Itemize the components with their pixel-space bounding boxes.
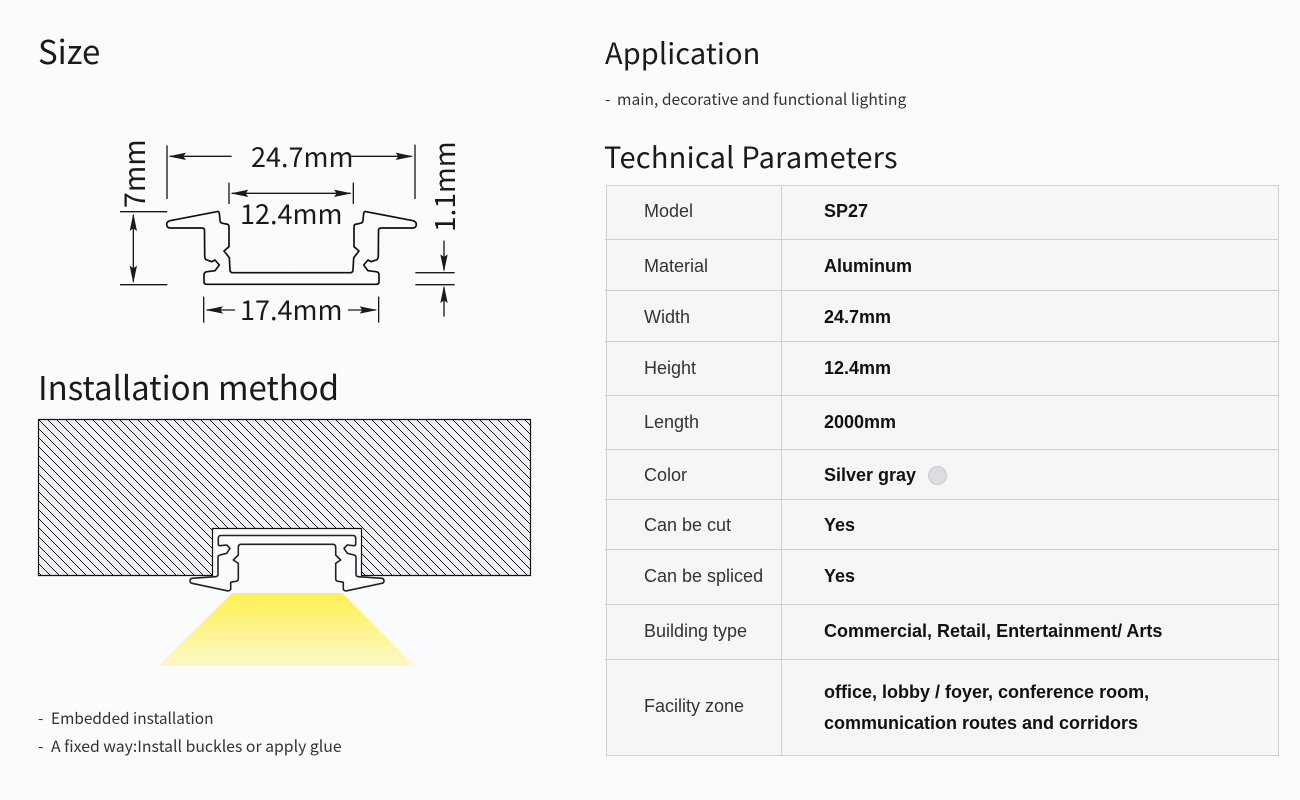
label: 1.1mm: 1.1mm	[424, 141, 464, 232]
value: Facility zone	[824, 682, 1149, 733]
light beam	[158, 593, 415, 666]
label: 12.4mm: 12.4mm	[240, 193, 342, 232]
value: Building type: Commercial, Retail, Entertainment/ Arts	[824, 621, 1162, 641]
technical parameters table	[606, 185, 1279, 756]
application text: main, decorative and functional lighting	[617, 88, 906, 110]
value: Can be cut: Yes	[824, 515, 855, 535]
row: Width: Width	[644, 307, 690, 327]
row: Height: Height	[644, 358, 696, 378]
label: 24.7mm: 24.7mm	[251, 136, 353, 175]
label: 17.4mm: 17.4mm	[240, 289, 342, 328]
installation note: fixing: -	[38, 734, 43, 757]
dimension lines	[120, 145, 455, 323]
value: Facility zone: communication routes and corridors	[824, 713, 1138, 733]
size diagram: profile cross-section with dimensions	[113, 136, 464, 328]
application text: -	[605, 88, 610, 110]
hatched ceiling with recess	[38, 420, 530, 576]
icon: silver gray swatch	[928, 466, 947, 485]
heading: Technical Parameters: Technical Parameters	[604, 135, 898, 177]
row: Model: Model	[644, 201, 693, 221]
value: Facility zone: office, lobby / foyer, conference room,	[824, 682, 1149, 702]
heading: Installation method: Installation method	[38, 362, 339, 410]
value: Material: Aluminum	[824, 256, 912, 276]
value: Length: 2000mm	[824, 412, 896, 432]
row: Material: Material	[644, 256, 708, 276]
installation note: embedded: -	[38, 707, 43, 729]
heading: Size: Size	[38, 26, 100, 74]
arrowheads	[130, 153, 448, 314]
label: 7mm: 7mm	[113, 139, 154, 208]
row: Can be cut: Can be cut	[644, 515, 731, 535]
recessed profile	[190, 536, 384, 591]
row: Can be spliced: Can be spliced	[644, 566, 763, 586]
installation note: embedded: Embedded installation	[51, 707, 213, 729]
row: Color: Color	[644, 465, 687, 485]
value: Can be spliced: Yes	[824, 566, 855, 586]
row: Building type: Building type	[644, 621, 747, 641]
value: Height: 12.4mm	[824, 358, 891, 378]
value: Model: SP27	[824, 201, 868, 221]
installation note: fixing: A fixed way:Install buckles or apply glue	[51, 734, 342, 757]
profile outline	[167, 212, 416, 284]
value: Color: Silver gray	[824, 465, 916, 485]
value: Width: 24.7mm	[824, 307, 891, 327]
row: Facility zone: Facility zone	[644, 696, 744, 716]
installation diagram	[38, 418, 532, 666]
heading: Application: Application	[605, 31, 760, 73]
row: Length: Length	[644, 412, 699, 432]
